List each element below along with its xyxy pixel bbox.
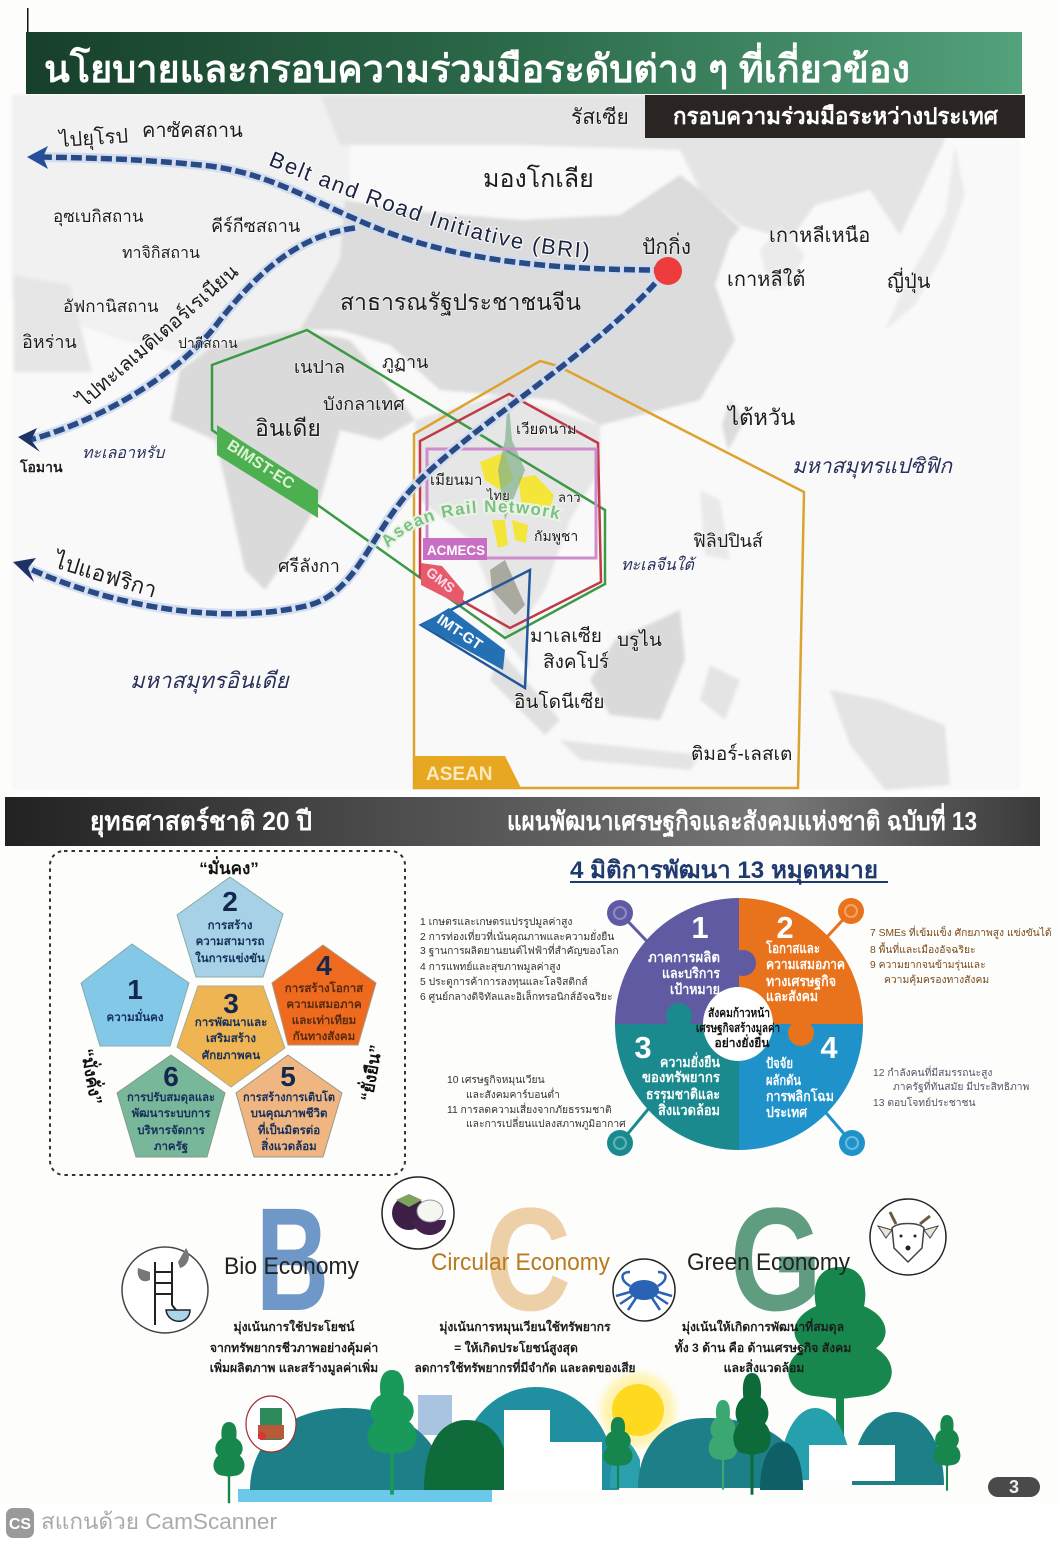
title banner <box>26 32 1022 94</box>
pentagon 6: พัฒนาระบบการ <box>132 1107 211 1120</box>
letter G: G <box>730 1178 822 1342</box>
country labels: โอมาน <box>19 458 63 475</box>
pentagon 6: ภาครัฐ <box>154 1140 189 1154</box>
arrowhead: to Oman <box>18 428 40 452</box>
country labels: อุซเบกิสถาน <box>53 207 144 227</box>
segment 4 <box>766 1030 838 1120</box>
country labels: ญี่ปุ่น <box>887 267 931 294</box>
pentagon 3 <box>177 986 285 1087</box>
pentagon 4: ความเสมอภาค <box>286 999 362 1011</box>
panel: 20-year national strategy pentagons <box>50 851 405 1175</box>
country labels: มาเลเซีย <box>530 625 602 647</box>
pentagon 6: การปรับสมดุลและ <box>127 1091 215 1105</box>
map: grey land masses <box>12 95 965 790</box>
country labels: ทะเลจีนใต้ <box>621 555 697 574</box>
IMT-GT label: IMT-GT <box>434 611 485 654</box>
goals list: dimension 4: 12 กำลังคนที่มีสมรรถนะสูง <box>873 1065 992 1079</box>
pentagon 2: การสร้าง <box>208 919 253 932</box>
pentagon 6: บริหารจัดการ <box>137 1124 206 1137</box>
country labels: มหาสมุทรอินเดีย <box>130 668 291 694</box>
segment 1: ภาคการผลิต <box>648 949 720 965</box>
CamScanner watermark: CS <box>9 1516 31 1533</box>
goals list: dimension 3 <box>447 1074 626 1130</box>
segment 2 <box>765 910 845 1004</box>
pentagon 1 <box>81 944 189 1046</box>
description: และสิ่งแวดล้อม <box>724 1359 804 1375</box>
goals list: dimension 1: 6 ศูนย์กลางดิจิทัลและอิเล็กทรอนิกส์อัจฉริยะ <box>420 989 612 1003</box>
pentagon 1: ความมั่นคง <box>107 1008 164 1024</box>
description <box>210 1319 378 1376</box>
BIMST-EC label: BIMST-EC <box>224 437 298 493</box>
BIMST-EC label <box>217 425 318 518</box>
pentagon 4: และเท่าเทียม <box>292 1014 356 1027</box>
centre text: สังคมก้าวหน้า <box>708 1006 770 1020</box>
label: stable: “มั่นคง” <box>199 856 259 878</box>
goals list: dimension 1: 1 เกษตรและเกษตรแปรรูปมูลค่าสูง <box>420 917 572 928</box>
segment 2: ทางเศรษฐกิจ <box>766 973 836 991</box>
country labels: อินโดนีเซีย <box>514 690 604 713</box>
country labels: ปากีสถาน <box>178 335 238 351</box>
BRI route label: Belt and Road Initiative (BRI) <box>268 150 590 264</box>
country labels: ไปทะเลเมดิเตอร์เรเนียน <box>72 260 243 413</box>
country labels: ติมอร์-เลสเต <box>691 743 792 765</box>
country labels <box>19 106 953 765</box>
country labels: เกาหลีใต้ <box>727 268 805 291</box>
ACMECS label <box>423 538 487 560</box>
GMS hexagon <box>420 394 601 628</box>
country labels: ลาว <box>558 490 581 505</box>
country labels: บังกลาเทศ <box>323 394 405 414</box>
CamScanner watermark: สแกนด้วย CamScanner <box>41 1509 277 1534</box>
letter C: C <box>485 1178 571 1342</box>
segment 2: ความเสมอภาค <box>766 956 845 972</box>
big tree <box>788 1267 892 1463</box>
goals list: dimension 2 <box>870 925 1052 986</box>
goals list: dimension 1: 4 การแพทย์และสุขภาพมูลค่าสูง <box>420 961 561 973</box>
country labels: ไทย <box>486 488 510 503</box>
goals list: dimension 4: 13 ตอบโจทย์ประชาชน <box>873 1096 976 1109</box>
segment 1: 1 <box>691 910 709 945</box>
description: มุ่งเน้นให้เกิดการพัฒนาที่สมดุล <box>682 1318 844 1335</box>
marker: Beijing <box>654 257 682 285</box>
pentagon 6: 6 <box>163 1061 179 1092</box>
country labels: เกาหลีเหนือ <box>769 225 870 247</box>
country labels: รัสเซีย <box>571 106 629 129</box>
icon: mangosteen <box>382 1177 454 1249</box>
country labels: มหาสมุทรแปซิฟิก <box>792 455 953 479</box>
pentagon 4: 4 <box>316 950 332 981</box>
pentagon 2 <box>177 877 283 977</box>
pentagon 5: 5 <box>280 1061 296 1092</box>
label: wealthy: “มั่งคั่ง” <box>77 1047 108 1106</box>
country labels: อินเดีย <box>255 415 321 441</box>
ASEAN label: ASEAN <box>426 764 493 785</box>
goals list: dimension 3: และสังคมคาร์บอนต่ำ <box>466 1087 560 1101</box>
ASEAN label <box>414 756 521 788</box>
country labels: เมียนมา <box>430 472 482 489</box>
segment 1 <box>648 910 720 997</box>
centre text <box>696 1006 780 1050</box>
country labels: อิหร่าน <box>22 332 77 352</box>
segment 3 <box>634 1030 720 1118</box>
pentagon 5: บนคุณภาพชีวิต <box>251 1107 327 1121</box>
country labels: ทะเลอาหรับ <box>82 445 166 462</box>
segment 4: ผลักดัน <box>766 1072 801 1088</box>
country labels: ไปยุโรป <box>57 124 129 153</box>
country labels: ไต้หวัน <box>726 405 795 430</box>
goals list: dimension 2: ความคุ้มครองทางสังคม <box>884 974 989 986</box>
country labels: กัมพูชา <box>534 528 578 545</box>
pentagon 5: การสร้างการเติบโต <box>243 1089 335 1104</box>
goals list: dimension 1: 2 การท่องเที่ยวที่เน้นคุณภาพและความยั่งยืน <box>420 929 614 943</box>
puzzle circle: four dimensions <box>607 898 865 1156</box>
goals list: dimension 3: 10 เศรษฐกิจหมุนเวียน <box>447 1074 545 1086</box>
country labels: สาธารณรัฐประชาชนจีน <box>340 289 581 316</box>
pentagon 2: 2 <box>222 886 238 917</box>
label: sustainable: “ยั่งยืน” <box>354 1043 386 1103</box>
goals list: dimension 4 <box>873 1065 1030 1109</box>
segment 3: 3 <box>634 1030 652 1065</box>
icon: goat <box>870 1199 946 1275</box>
pentagon 3: เสริมสร้าง <box>206 1032 256 1045</box>
handle icons <box>607 898 865 1156</box>
country labels: สิงคโปร์ <box>543 650 609 673</box>
goals list: dimension 1: 5 ประตูการค้าการลงทุนและโลจิสติกส์ <box>420 975 588 988</box>
icon: sapling and shovel <box>122 1247 208 1333</box>
page number: 3 <box>1009 1477 1019 1497</box>
Thailand and neighbours fill <box>480 395 554 615</box>
description: = ให้เกิดประโยชน์สูงสุด <box>454 1340 578 1356</box>
country labels: ทาจิกิสถาน <box>122 245 200 262</box>
panel: BCG Bio economy <box>210 1178 378 1376</box>
goals list: dimension 3: และการเปลี่ยนแปลงสภาพภูมิอากาศ <box>466 1116 626 1130</box>
segment 1: และบริการ <box>662 965 720 981</box>
segment 3: ความยั่งยืน <box>660 1052 720 1070</box>
pentagon 5: ที่เป็นมิตรต่อ <box>258 1121 320 1137</box>
goals list: dimension 1: 3 ฐานการผลิตยานยนต์ไฟฟ้าที่สำคัญของโลก <box>420 943 619 957</box>
icon: village <box>246 1396 296 1452</box>
description: มุ่งเน้นการใช้ประโยชน์ <box>234 1319 355 1335</box>
segment 4: ปัจจัย <box>766 1055 793 1071</box>
routes: dashed arrows <box>28 157 665 614</box>
pentagon 2: ความสามารถ <box>196 936 264 948</box>
letter B: B <box>256 1178 329 1342</box>
country labels: คาซัคสถาน <box>142 120 243 142</box>
ASEAN frame <box>414 361 804 788</box>
pentagon 1: 1 <box>127 974 143 1005</box>
subtitle banner: international cooperation <box>645 95 1025 138</box>
heading: Circular Economy <box>431 1249 610 1276</box>
country labels: ภูฏาน <box>382 352 428 373</box>
segment 2: 2 <box>776 910 794 945</box>
title banner: นโยบายและกรอบความร่วมมือระดับต่าง ๆ ที่เกี่ยวข้อง <box>44 42 910 91</box>
pentagon 5 <box>236 1055 342 1157</box>
description: จากทรัพยากรชีวภาพอย่างคุ้มค่า <box>210 1341 378 1356</box>
ACMECS frame <box>423 449 596 560</box>
section bar: national strategy and plan: ยุทธศาสตร์ชาติ 20 ปี <box>90 806 312 838</box>
description: เพิ่มผลิตภาพ และสร้างมูลค่าเพิ่ม <box>210 1359 378 1376</box>
pentagon 3: การพัฒนาและ <box>195 1016 267 1029</box>
centre text: เศรษฐกิจสร้างมูลค่า <box>696 1021 780 1036</box>
pentagon 5: สิ่งแวดล้อม <box>261 1137 317 1153</box>
segment 4: การพลิกโฉม <box>766 1087 834 1104</box>
description <box>414 1319 636 1375</box>
segment 3: สิ่งแวดล้อม <box>658 1100 720 1118</box>
section bar: national strategy and plan: แผนพัฒนาเศรษฐกิจและสังคมแห่งชาติ ฉบับที่ 13 <box>507 802 977 839</box>
pentagon 3: ศักยภาพคน <box>202 1049 260 1062</box>
ACMECS label: ACMECS <box>427 542 485 558</box>
segment 4: ประเทศ <box>766 1104 808 1120</box>
GMS label <box>421 563 464 606</box>
country labels: อัฟกานิสถาน <box>63 297 159 316</box>
BIMST-EC frame <box>212 330 605 638</box>
heading: Green Economy <box>687 1249 850 1276</box>
country labels: ไปแอฟริกา <box>50 547 160 603</box>
segment 2: โอกาสและ <box>765 939 820 956</box>
page number <box>988 1477 1040 1497</box>
segment 1: เป้าหมาย <box>670 981 720 997</box>
pentagon 4 <box>272 945 376 1045</box>
description: มุ่งเน้นการหมุนเวียนใช้ทรัพยากร <box>439 1319 611 1335</box>
Asean rail network label: Asean Rail Network <box>380 498 564 551</box>
goals list: dimension 2: 9 ความยากจนข้ามรุ่นและ <box>870 959 986 971</box>
goals list: dimension 1 <box>420 917 619 1003</box>
country labels: ฟิลิปปินส์ <box>693 531 763 551</box>
goals list: dimension 3: 11 การลดความเสี่ยงจากภัยธรรมชาติ <box>447 1102 612 1116</box>
IMT-GT triangle <box>421 570 530 688</box>
segment 3: ธรรมชาติและ <box>646 1086 720 1102</box>
heading: 4 dimensions 13 milestones: 4 มิติการพัฒนา 13 หมุดหมาย <box>570 857 878 886</box>
description <box>675 1318 851 1375</box>
country labels: บรูไน <box>617 629 662 651</box>
pentagon 2: ในการแข่งขัน <box>195 951 265 965</box>
arrowhead: to Africa <box>13 558 36 582</box>
goals list: dimension 2: 7 SMEs ที่เข้มแข็ง ศักยภาพสูง แข่งขันได้ <box>870 925 1052 939</box>
panel: BCG Green economy <box>675 1178 851 1375</box>
section bar: national strategy and plan <box>5 797 1040 846</box>
pentagon 6 <box>117 1055 225 1157</box>
country labels: มองโกเลีย <box>483 164 594 193</box>
GMS label: GMS <box>423 564 458 596</box>
subtitle banner: international cooperation: กรอบความร่วมมือระหว่างประเทศ <box>673 103 998 129</box>
segment 4: 4 <box>820 1030 838 1065</box>
country labels: คีร์กีซสถาน <box>211 216 300 236</box>
country labels: ปักกิ่ง <box>642 232 691 259</box>
icon: blue crab <box>613 1259 675 1321</box>
segment 3: ของทรัพยากร <box>642 1069 720 1085</box>
pentagon 4: การสร้างโอกาส <box>285 980 364 995</box>
country labels: เนปาล <box>294 357 345 377</box>
landscape illustration <box>213 1267 960 1503</box>
goals list: dimension 2: 8 พื้นที่และเมืองอัจฉริยะ <box>870 942 976 956</box>
description: ทั้ง 3 ด้าน คือ ด้านเศรษฐกิจ สังคม <box>675 1338 851 1356</box>
goals list: dimension 4: ภาครัฐที่ทันสมัย มีประสิทธิภาพ <box>893 1079 1030 1093</box>
centre text: อย่างยั่งยืน <box>714 1034 770 1050</box>
country labels: ศรีลังกา <box>278 556 340 576</box>
pentagon 3: 3 <box>223 988 239 1019</box>
pentagon 4: กันทางสังคม <box>293 1030 355 1043</box>
country labels: เวียดนาม <box>516 421 577 438</box>
description: ลดการใช้ทรัพยากรที่มีจำกัด และลดของเสีย <box>414 1359 636 1375</box>
map panel <box>12 94 966 790</box>
heading: Bio Economy <box>224 1253 359 1280</box>
panel: BCG Circular economy <box>414 1178 636 1375</box>
arrowhead: to Europe <box>27 146 48 169</box>
sun <box>601 1373 675 1447</box>
segment 2: และสังคม <box>766 988 818 1004</box>
